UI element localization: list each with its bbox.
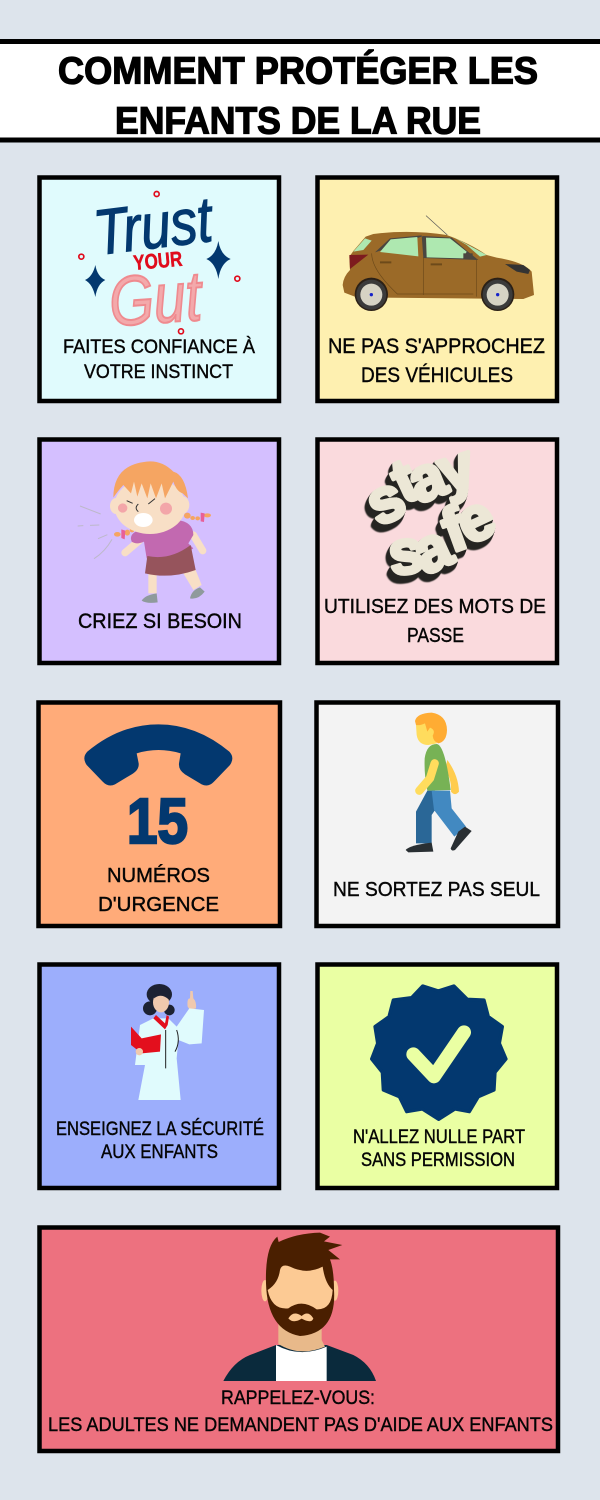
panel: reminder [40,1228,558,1451]
label: D'URGENCE [98,893,219,916]
panel: do not go out alone [316,702,558,926]
label: FAITES CONFIANCE À [63,337,255,358]
icon: stay safe lettering: safe [384,481,505,589]
number 15: 15 [127,785,188,857]
icon: trust your gut lettering [79,183,240,341]
label: VOTRE INSTINCT [84,362,233,383]
title banner [0,42,600,142]
panel: shout [40,440,279,663]
label: NE SORTEZ PAS SEUL [333,878,540,901]
icon: walking person [406,713,472,852]
title: COMMENT PROTÉGER LES [58,48,538,92]
label: CRIEZ SI BESOIN [78,610,242,633]
icon: trust your gut lettering: YOUR [132,248,183,275]
label: SANS PERMISSION [361,1150,515,1171]
panel: passwords [318,430,557,663]
label: RAPPELEZ-VOUS: [221,1387,375,1409]
label: AUX ENFANTS [101,1142,218,1163]
label: NUMÉROS [107,864,210,887]
label: UTILISEZ DES MOTS DE [324,595,546,618]
icon: stay safe lettering: stay [355,430,483,539]
title: ENFANTS DE LA RUE [115,100,481,142]
icon: shouting girl [78,461,211,603]
panel: teach safety [40,964,279,1188]
icon: check badge [372,986,506,1119]
label: DES VÉHICULES [361,364,513,387]
panel: no going anywhere without permission [318,964,557,1188]
icon: teacher [131,984,204,1100]
label: NE PAS S'APPROCHEZ [328,335,545,358]
icon: phone handset [84,724,232,786]
icon: trust your gut lettering: Trust [90,183,218,269]
panel: trust your instinct [40,178,279,401]
panel: emergency numbers [38,702,280,926]
icon: trust your gut lettering: Gut [107,257,206,341]
icon: car [343,216,534,311]
label: LES ADULTES NE DEMANDENT PAS D'AIDE AUX ENFANTS [48,1414,553,1436]
icon: stay safe lettering [355,430,505,589]
label: N'ALLEZ NULLE PART [353,1127,525,1148]
label: ENSEIGNEZ LA SÉCURITÉ [56,1119,264,1140]
panel: vehicles [318,178,557,401]
label: PASSE [407,624,464,647]
icon: bearded man [223,1233,376,1381]
